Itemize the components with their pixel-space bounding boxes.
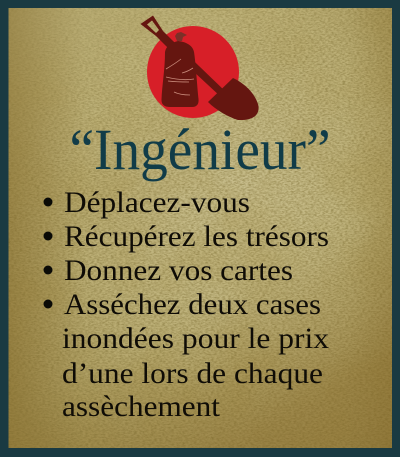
- list item: move: Déplacez-vous: [64, 186, 250, 219]
- bullet list: [44, 186, 329, 423]
- icon: red circle: [147, 26, 239, 118]
- list item: shore up: inondées pour le prix: [62, 322, 329, 355]
- list item: shore up: Asséchez deux cases: [64, 288, 321, 321]
- list item: collect treasures: Récupérez les trésors: [64, 220, 329, 253]
- list item: shore up: [44, 288, 329, 423]
- list item: shore up: assèchement: [62, 390, 221, 423]
- icon: shovel: [140, 16, 259, 120]
- list item: give cards: Donnez vos cartes: [64, 254, 293, 287]
- icon: sack: [162, 32, 199, 107]
- title: “Ingénieur”: [70, 117, 330, 182]
- list item: shore up: d’une lors de chaque: [62, 357, 323, 390]
- icon: shovel and sack on red circle: [140, 16, 259, 120]
